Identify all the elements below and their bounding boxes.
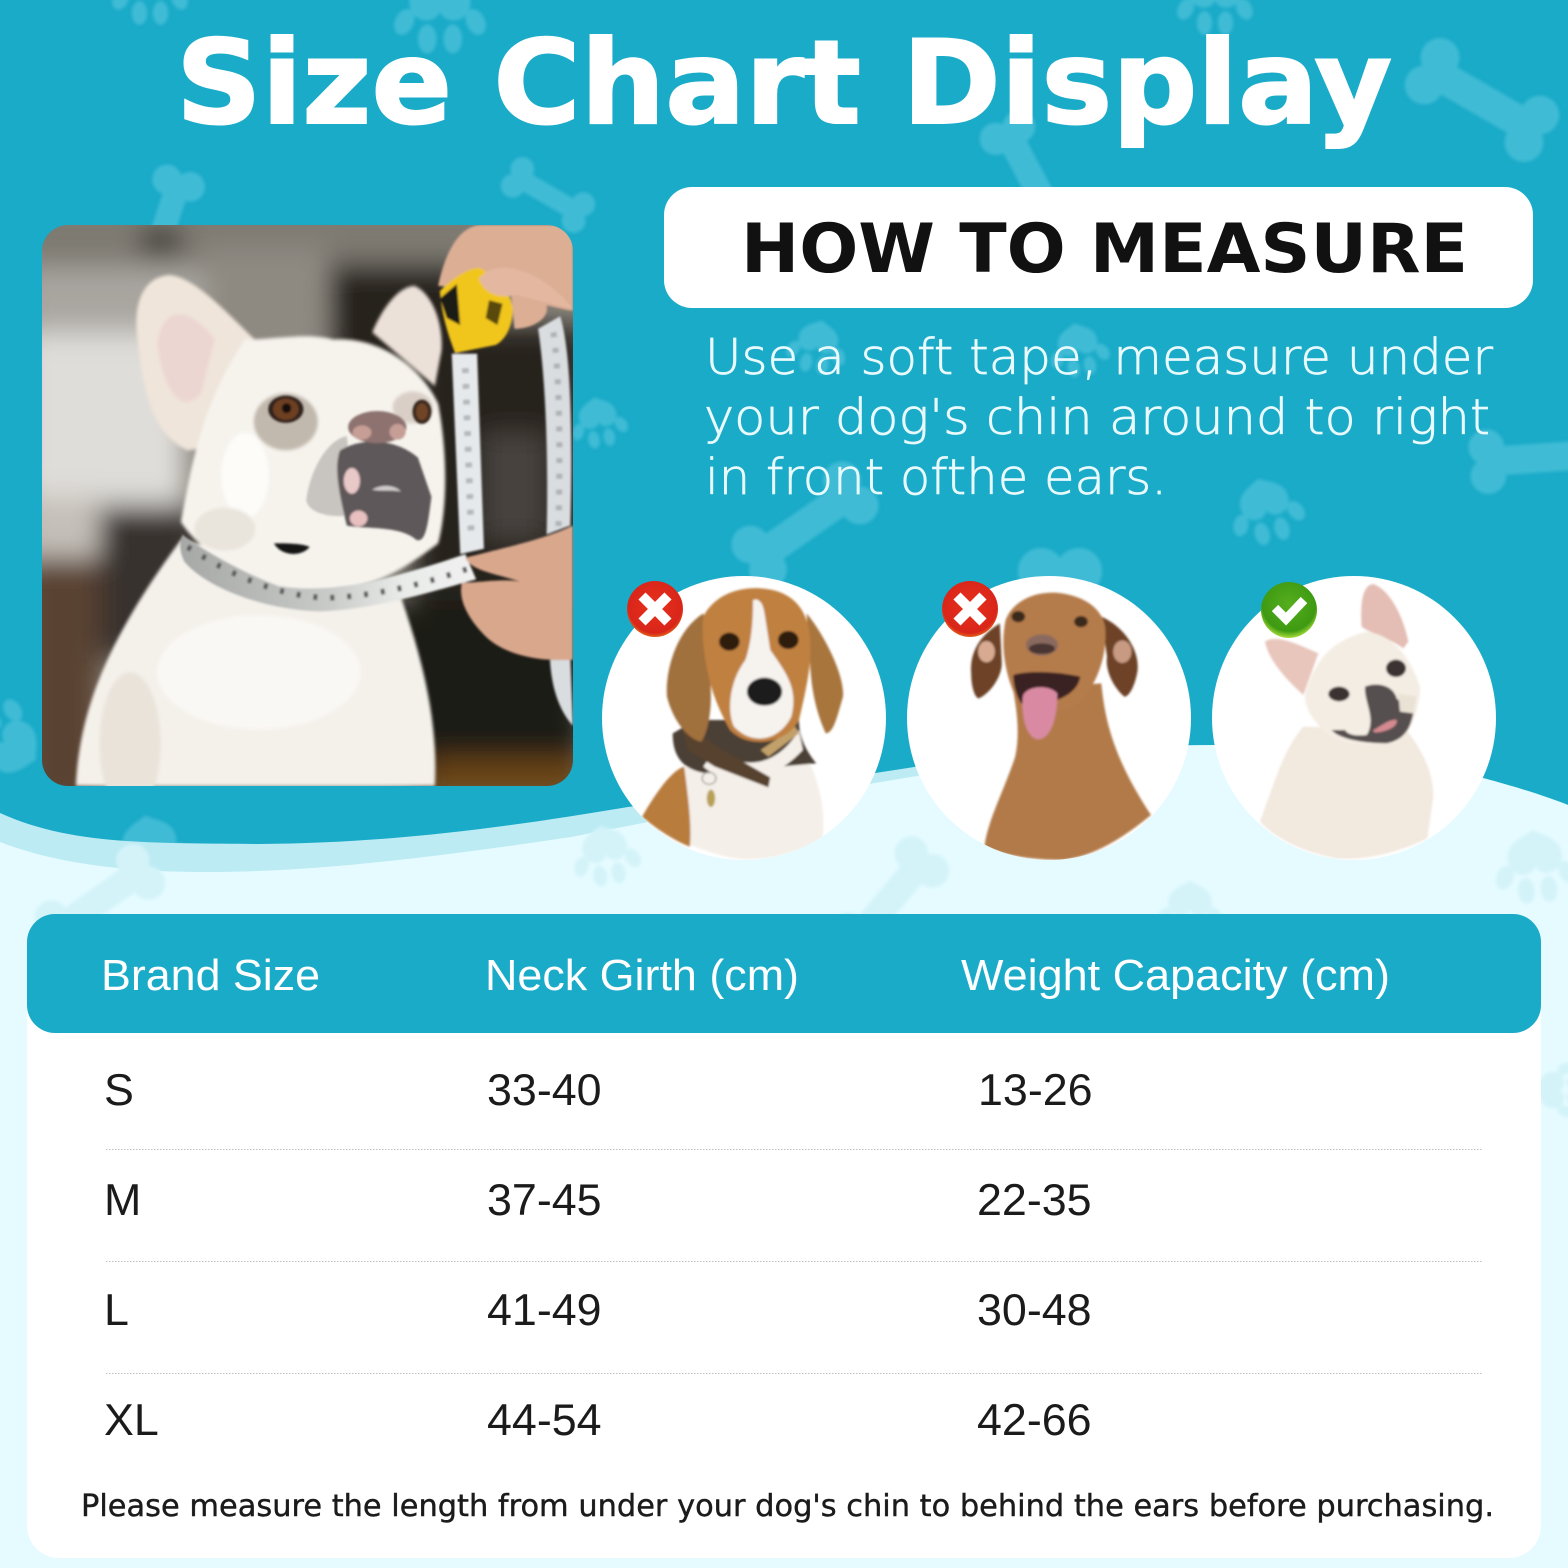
row M: 37-45 bbox=[487, 1175, 602, 1225]
instruction text bbox=[704, 329, 1494, 506]
row L: 30-48 bbox=[977, 1285, 1092, 1335]
table header: Neck Girth (cm) bbox=[485, 951, 799, 1000]
row M bbox=[104, 1175, 1092, 1225]
right ear bbox=[372, 286, 442, 386]
tape measure bbox=[440, 268, 513, 353]
row S: 13-26 bbox=[978, 1065, 1093, 1115]
wave: lower light background bbox=[0, 745, 1568, 1568]
row M: 22-35 bbox=[977, 1175, 1092, 1225]
nose bbox=[348, 411, 406, 443]
mouth bbox=[274, 543, 310, 554]
row S: 33-40 bbox=[487, 1065, 602, 1115]
footnote: Please measure the length from under your dog's chin to behind the ears before purchasing. bbox=[81, 1489, 1494, 1524]
row M: M bbox=[104, 1175, 141, 1225]
table header: Brand Size bbox=[101, 951, 320, 1000]
table header bbox=[27, 914, 1541, 1033]
vertical tape bbox=[452, 354, 484, 554]
row S bbox=[104, 1065, 1093, 1115]
row XL bbox=[104, 1395, 1092, 1445]
row XL: XL bbox=[104, 1395, 159, 1445]
top hand bbox=[438, 225, 573, 329]
table header: Weight Capacity (cm) bbox=[961, 951, 1390, 1000]
far tape bbox=[538, 316, 571, 534]
instruction text: your dog's chin around to right bbox=[704, 389, 1490, 446]
example dog: French bulldog, correct bbox=[1212, 576, 1496, 860]
size table bbox=[27, 914, 1541, 1558]
icon: red cross badge 1 bbox=[627, 581, 683, 637]
row XL: 44-54 bbox=[487, 1395, 602, 1445]
head bbox=[181, 336, 445, 594]
example dog: beagle, wrong bbox=[602, 576, 886, 860]
row L: 41-49 bbox=[487, 1285, 602, 1335]
instruction text: Use a soft tape, measure under bbox=[705, 329, 1494, 386]
bottom hand bbox=[461, 526, 573, 660]
photo: measuring a French bulldog's neck bbox=[42, 225, 573, 786]
row L: L bbox=[104, 1285, 129, 1335]
icon: green check badge bbox=[1261, 582, 1317, 638]
muzzle bbox=[306, 436, 355, 516]
row S: S bbox=[104, 1065, 134, 1115]
row XL: 42-66 bbox=[977, 1395, 1092, 1445]
example dog: open-mouthed brown dog, wrong bbox=[907, 576, 1191, 860]
icon: red cross badge 2 bbox=[942, 581, 998, 637]
left ear bbox=[136, 275, 259, 450]
collar tape bbox=[180, 534, 476, 611]
dog body bbox=[76, 540, 435, 786]
title: Size Chart Display bbox=[176, 16, 1392, 151]
how to measure heading: HOW TO MEASURE bbox=[741, 210, 1468, 289]
row L bbox=[104, 1285, 1092, 1335]
instruction text: in front ofthe ears. bbox=[705, 449, 1167, 506]
how to measure heading bbox=[664, 187, 1533, 308]
